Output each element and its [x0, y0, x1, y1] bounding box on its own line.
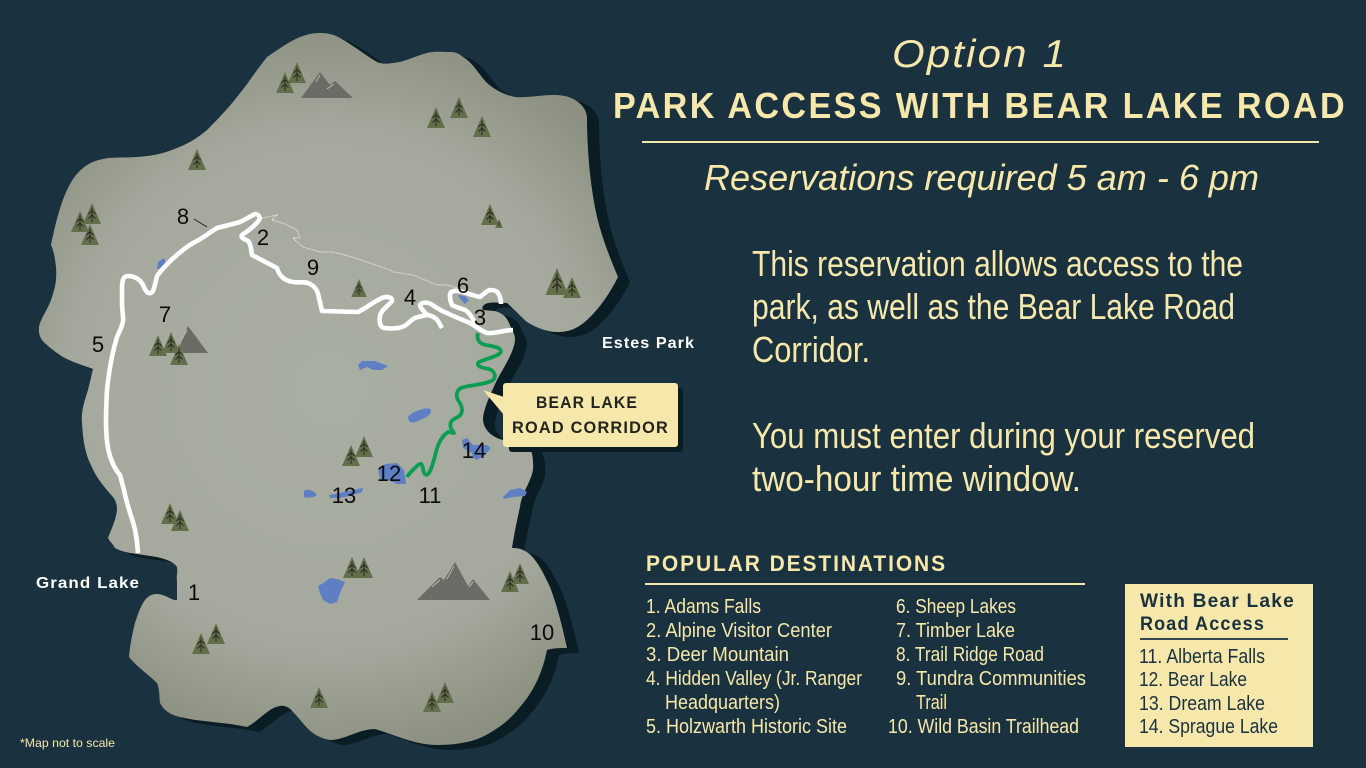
lake: Sheep Lakes	[458, 295, 469, 304]
map number labels: 8	[177, 204, 189, 229]
popular destinations rule	[645, 583, 1085, 585]
trees: south-east pair	[501, 563, 529, 592]
map number labels: 5	[92, 332, 104, 357]
popular destinations heading: POPULAR DESTINATIONS	[646, 551, 947, 576]
access box	[1125, 584, 1313, 747]
destination list column 2: 9. Tundra Communities	[896, 668, 1086, 690]
description text: You must enter during your reserved	[752, 415, 1255, 456]
heading rule	[642, 141, 1319, 143]
callout: Bear Lake Road Corridor	[483, 383, 683, 452]
access box heading: Road Access	[1140, 614, 1265, 635]
access box heading	[1140, 591, 1295, 635]
map number labels: 3	[474, 305, 486, 330]
panel: popular destinations	[645, 551, 1086, 738]
lake: east edge	[503, 488, 527, 499]
trees: south-west pair	[161, 503, 189, 531]
title block	[613, 33, 1347, 198]
panel: with Bear Lake Road access	[1125, 584, 1313, 747]
map number labels: 4	[404, 285, 416, 310]
access box list: 12. Bear Lake	[1139, 669, 1247, 691]
destination list column 2: 8. Trail Ridge Road	[896, 644, 1044, 666]
access box heading: With Bear Lake	[1140, 591, 1295, 612]
map land area	[39, 33, 618, 745]
description text: two-hour time window.	[752, 458, 1081, 499]
lake: Sprague Lake	[462, 438, 491, 460]
lake: upper centre	[358, 361, 388, 370]
map number labels: 7	[159, 302, 171, 327]
callout: Bear Lake Road Corridor: ROAD CORRIDOR	[512, 419, 669, 437]
trees: Timber Lake	[149, 332, 188, 365]
lake: Bear Lake	[378, 463, 406, 484]
description text	[752, 243, 1255, 499]
destination list column 2: Trail	[916, 692, 947, 714]
access box list: 11. Alberta Falls	[1139, 646, 1265, 668]
destination list column 1: 5. Holzwarth Historic Site	[646, 716, 847, 738]
label: Estes Park: Estes Park	[602, 335, 695, 352]
callout: Bear Lake Road Corridor: BEAR LAKE	[536, 394, 638, 412]
trees	[71, 62, 581, 712]
destination list column 1: 1. Adams Falls	[646, 596, 761, 618]
destination list column 1: Headquarters)	[665, 692, 780, 714]
lake: Dream Lake	[329, 488, 363, 498]
access box list	[1139, 646, 1278, 738]
mountain: north	[301, 72, 353, 98]
main heading: PARK ACCESS WITH BEAR LAKE ROAD	[613, 85, 1347, 126]
lake: centre	[408, 408, 431, 422]
trees: far south pair	[423, 682, 454, 712]
pointer line for label 8	[194, 219, 207, 227]
map number labels: 6	[457, 273, 469, 298]
destination list column 2	[888, 596, 1086, 738]
access box rule	[1140, 638, 1288, 640]
map number labels	[92, 204, 554, 645]
map number labels: 13	[332, 483, 356, 508]
trees: north-west pair	[276, 62, 306, 93]
description text: park, as well as the Bear Lake Road	[752, 286, 1235, 327]
trees: centre pair	[342, 436, 373, 466]
trees: west trio	[71, 203, 101, 245]
destination list column 1: 3. Deer Mountain	[646, 644, 789, 666]
lake: large south	[318, 578, 345, 604]
access box list: 14. Sprague Lake	[1139, 716, 1278, 738]
lake: near Trail Ridge Road	[157, 258, 166, 269]
mountain: Timber Lake	[177, 326, 208, 353]
map shadow	[51, 38, 630, 750]
destination list column 1: 4. Hidden Valley (Jr. Ranger	[646, 668, 862, 690]
option label: Option 1	[892, 33, 1068, 76]
note: map not to scale: *Map not to scale	[20, 736, 115, 750]
destination list column 1: 2. Alpine Visitor Center	[646, 620, 832, 642]
access box list: 13. Dream Lake	[1139, 693, 1265, 715]
map number labels: 11	[419, 483, 441, 508]
map number labels: 1	[188, 580, 200, 605]
tree: north	[188, 149, 206, 170]
road: Bear Lake Road Corridor	[407, 333, 501, 477]
reservation hours: Reservations required 5 am - 6 pm	[704, 157, 1259, 198]
destination list column 1	[646, 596, 862, 738]
map number labels: 10	[530, 620, 554, 645]
trees: near Adams Falls	[192, 623, 225, 654]
tree: south	[310, 687, 328, 708]
destination list column 2: 10. Wild Basin Trailhead	[888, 716, 1079, 738]
road: Trail Ridge Road	[106, 214, 513, 553]
map number labels: 2	[257, 225, 269, 250]
trees: north-east trio	[427, 97, 491, 137]
lakes	[157, 258, 527, 604]
map number labels: 12	[377, 461, 401, 486]
map number labels: 9	[307, 255, 319, 280]
description text: This reservation allows access to the	[752, 243, 1243, 284]
mountain: south	[417, 562, 490, 600]
description text: Corridor.	[752, 329, 870, 370]
road: Tundra Communities Trail dotted	[262, 215, 457, 288]
trees: south centre pair	[343, 557, 373, 578]
destination list column 2: 7. Timber Lake	[896, 620, 1015, 642]
lake: small west	[304, 490, 317, 498]
trees: east edge pair	[545, 268, 581, 298]
label: Grand Lake: Grand Lake	[36, 575, 140, 592]
destination list column 2: 6. Sheep Lakes	[896, 596, 1016, 618]
map of the park	[36, 33, 695, 750]
trees: east with small tree	[481, 204, 503, 228]
map number labels: 14	[462, 438, 486, 463]
tree: centre	[351, 279, 367, 297]
